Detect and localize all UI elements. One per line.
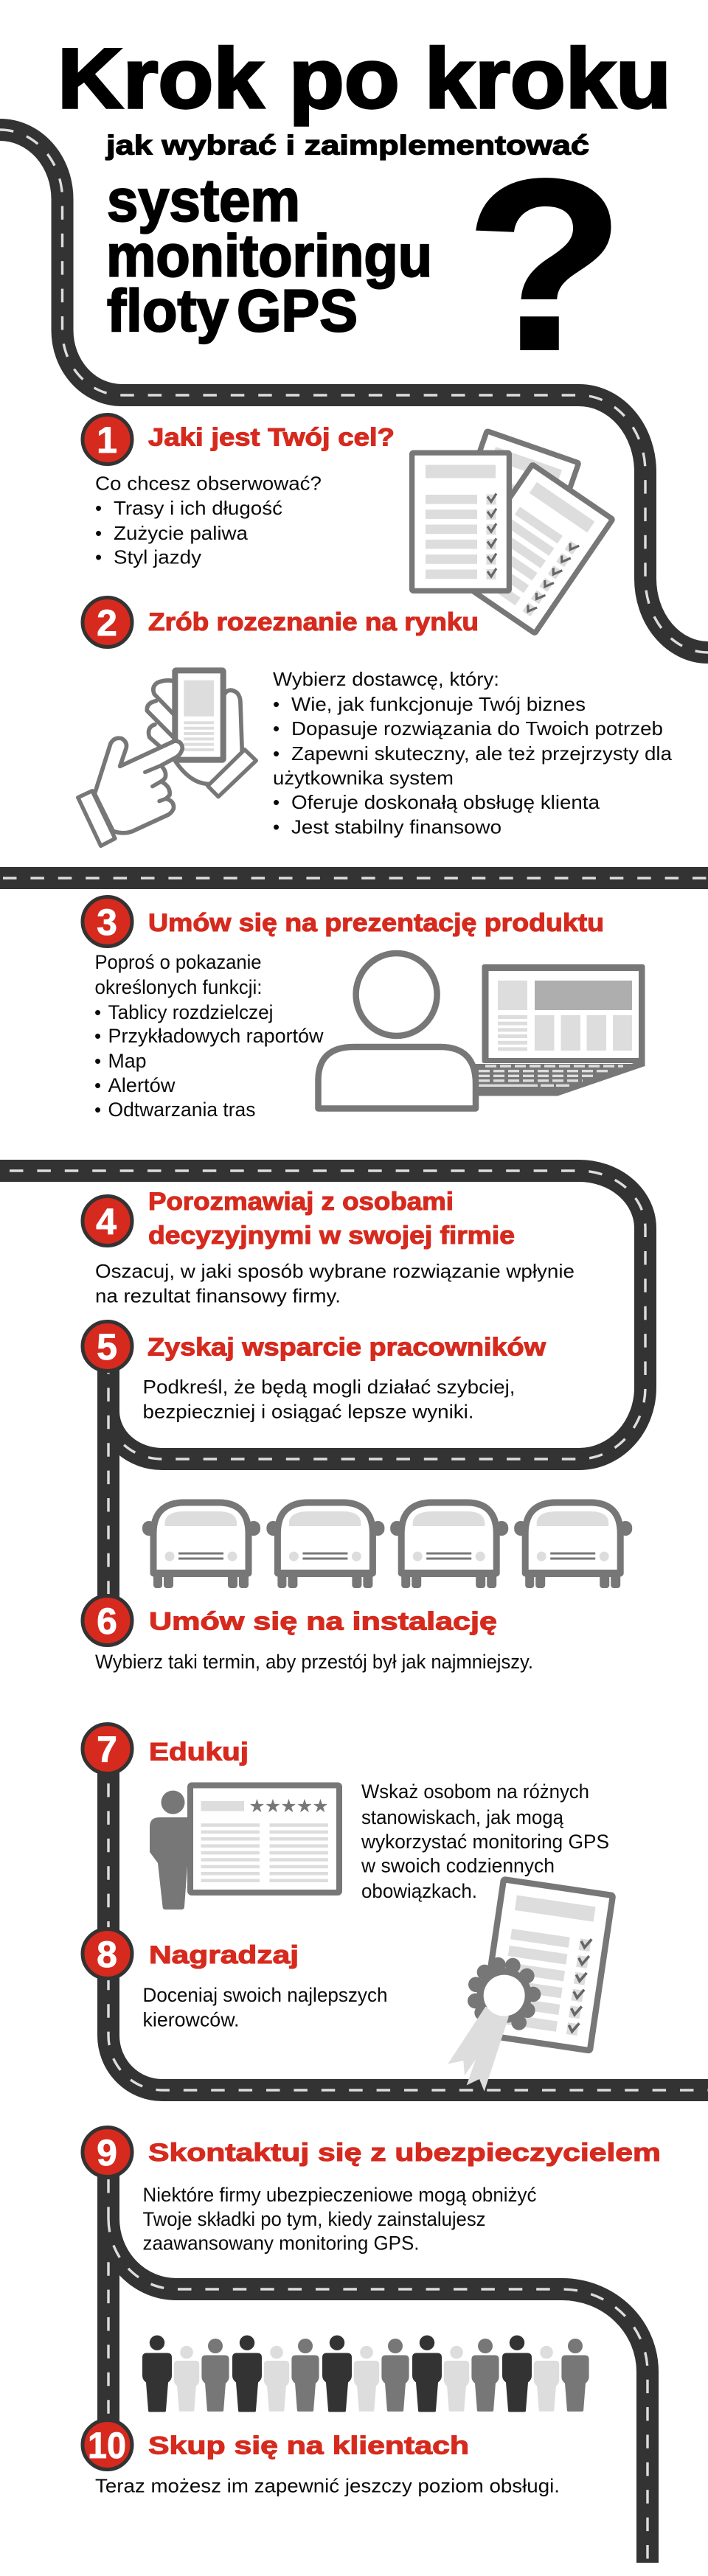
text step 5 [143, 1376, 515, 1423]
text step 2: • [273, 791, 280, 813]
step 4: decision makers [83, 1188, 575, 1306]
icon: crowd of people [142, 2336, 589, 2412]
subtitle: jak wybrać i zaimplementować: jak wybrać i zaimplementować [105, 130, 589, 161]
text step 2: • [273, 742, 280, 765]
road: top curve from left edge to right edge [0, 130, 708, 652]
text step 1: Trasy i ich długość [114, 497, 282, 519]
text step 5: bezpieczniej i osiągać lepsze wyniki. [143, 1401, 473, 1423]
text step 3: • [94, 1050, 101, 1072]
text step 3: • [94, 1099, 101, 1121]
text step 7: stanowiskach, jak mogą [361, 1806, 564, 1828]
text step 3: Przykładowych raportów [108, 1025, 324, 1047]
text step 3: • [94, 1025, 101, 1047]
text step 1: • [95, 497, 102, 519]
text step 8: Doceniaj swoich najlepszych [143, 1984, 388, 2006]
text step 1 [95, 472, 322, 568]
text step 3: Map [108, 1050, 146, 1072]
heading step 6: Umów się na instalację [149, 1607, 497, 1635]
text step 3: • [94, 1001, 101, 1023]
number badge 9: 9 [97, 2132, 117, 2173]
text step 2: • [273, 693, 280, 715]
text step 9: Niektóre firmy ubezpieczeniowe mogą obniżyć [143, 2184, 537, 2206]
icon: certificate with rosette [448, 1879, 613, 2092]
step 5: employee support [83, 1321, 546, 1423]
text step 9: Twoje składki po tym, kiedy zainstalujesz [143, 2208, 485, 2230]
icon: hand with phone [78, 670, 256, 846]
text step 2: Jest stabilny finansowo [291, 815, 502, 838]
text step 4 [95, 1260, 575, 1306]
step 7: educate [83, 1724, 609, 1910]
text step 7: wykorzystać monitoring GPS [361, 1831, 609, 1853]
step 8: reward [83, 1879, 613, 2092]
text step 2: Wybierz dostawcę, który: [273, 668, 499, 690]
number badge 1 [83, 414, 132, 464]
road: from step 9 branch to lower right [108, 2156, 648, 2563]
number badge 9 [83, 2128, 132, 2176]
number badge 2: 2 [97, 602, 117, 644]
text step 7: Wskaż osobom na różnych [361, 1780, 589, 1803]
text step 1: Styl jazdy [114, 546, 201, 568]
text step 1: Zużycie paliwa [114, 522, 249, 544]
heading: system monitoringu floty GPS [106, 168, 432, 344]
icon: row of four buses [142, 1503, 632, 1588]
heading step 1: Jaki jest Twój cel? [148, 423, 395, 451]
text step 8: kierowców. [143, 2008, 239, 2030]
number badge 10 [83, 2420, 132, 2470]
text step 1: • [95, 546, 102, 568]
number badge 10: 10 [88, 2425, 126, 2466]
number badge 1: 1 [97, 420, 117, 461]
number badge 7 [83, 1724, 132, 1774]
road: straight horizontal divider [0, 867, 708, 889]
heading step 2: Zrób rozeznanie na rynku [148, 608, 479, 636]
text step 2: • [273, 815, 280, 838]
text step 2 [273, 668, 673, 838]
text step 9 [143, 2184, 537, 2255]
icon: checklist papers [412, 431, 613, 633]
text step 9: zaawansowany monitoring GPS. [143, 2232, 419, 2255]
heading step 10: Skup się na klientach [148, 2431, 469, 2460]
number badge 8 [83, 1929, 132, 1979]
number badge 5: 5 [97, 1326, 117, 1368]
text step 3: • [94, 1074, 101, 1096]
text step 7: obowiązkach. [361, 1880, 477, 1902]
text step 3: Poproś o pokazanie [94, 951, 261, 973]
text step 8 [143, 1984, 388, 2030]
heading step 5: Zyskaj wsparcie pracowników [148, 1333, 546, 1361]
text step 2: • [273, 717, 280, 739]
text step 2: Oferuje doskonałą obsługę klienta [291, 791, 600, 813]
icon: presenter at board [150, 1786, 339, 1910]
number badge 7: 7 [97, 1729, 117, 1770]
text step 3 [94, 951, 324, 1121]
text step 3: Odtwarzania tras [108, 1099, 255, 1121]
number badge 6: 6 [97, 1601, 117, 1642]
text step 1: • [95, 522, 102, 544]
icon: presenter at board: ★ [296, 1796, 313, 1817]
number badge 8: 8 [97, 1934, 117, 1975]
number badge 6 [83, 1595, 132, 1646]
icon: presenter at board: ★ [312, 1796, 329, 1817]
text step 6: Wybierz taki termin, aby przestój był jak najmniejszy. [95, 1651, 533, 1673]
text step 3: określonych funkcji: [94, 976, 263, 998]
text step 10: Teraz możesz im zapewnić jeszczy poziom obsługi. [95, 2474, 560, 2496]
heading step 4: decyzyjnymi w swojej firmie [148, 1222, 515, 1250]
text step 5: Podkreśl, że będą mogli działać szybciej, [143, 1376, 515, 1398]
number badge 4 [83, 1196, 132, 1246]
number badge 3: 3 [97, 902, 117, 943]
heading: system monitoringu floty GPS: system [107, 168, 300, 234]
text step 2: użytkownika system [273, 767, 454, 789]
text step 7: w swoich codziennych [361, 1855, 555, 1877]
text step 3: Alertów [108, 1074, 176, 1096]
heading step 7: Edukuj [149, 1738, 249, 1766]
icon: presenter at board: ★ [249, 1796, 266, 1817]
step 10: focus on customers [83, 2420, 560, 2496]
text step 1: Co chcesz obserwować? [95, 472, 322, 494]
heading: system monitoringu floty GPS: floty [107, 278, 229, 344]
step 2: market research [78, 597, 673, 846]
road: from step 7 through step 8 to right edge [108, 1755, 708, 2090]
heading step 4: Porozmawiaj z osobami [148, 1188, 454, 1216]
number badge 4: 4 [96, 1201, 117, 1242]
step 1: goal [83, 414, 613, 633]
text step 2: Wie, jak funkcjonuje Twój biznes [291, 693, 586, 715]
step 6: installation [83, 1595, 533, 1673]
heading: system monitoringu floty GPS: GPS [237, 278, 358, 344]
heading step 8: Nagradzaj [149, 1941, 299, 1969]
number badge 3 [83, 897, 132, 947]
number badge 5 [83, 1321, 132, 1371]
text step 4: Oszacuj, w jaki sposób wybrane rozwiązanie wpłynie [95, 1260, 575, 1282]
icon: person silhouette [319, 953, 476, 1109]
icon: big question mark: ? [465, 128, 625, 402]
heading step 9: Skontaktuj się z ubezpieczycielem [148, 2139, 661, 2167]
heading step 4 [148, 1188, 515, 1250]
text step 2: Dopasuje rozwiązania do Twoich potrzeb [291, 717, 663, 739]
heading step 3: Umów się na prezentację produktu [148, 909, 604, 937]
step 3: product demo [83, 897, 645, 1121]
step 9: contact insurer [83, 2128, 661, 2255]
road: loop around steps 4 and 5 [0, 1171, 645, 1459]
text step 2: Zapewni skuteczny, ale też przejrzysty dla [291, 742, 673, 765]
heading: system monitoringu floty GPS: monitoringu [106, 223, 432, 289]
title: Krok po kroku: Krok po kroku [58, 32, 671, 126]
icon: laptop [472, 964, 645, 1096]
road: vertical link from step 5 to step 6 [97, 1349, 119, 1604]
text step 3: Tablicy rozdzielczej [108, 1001, 273, 1023]
icon: presenter at board: ★ [280, 1796, 297, 1817]
text step 7 [361, 1780, 609, 1902]
text step 4: na rezultat finansowy firmy. [95, 1284, 341, 1306]
number badge 2 [83, 597, 132, 647]
icon: presenter at board: ★ [265, 1796, 281, 1817]
